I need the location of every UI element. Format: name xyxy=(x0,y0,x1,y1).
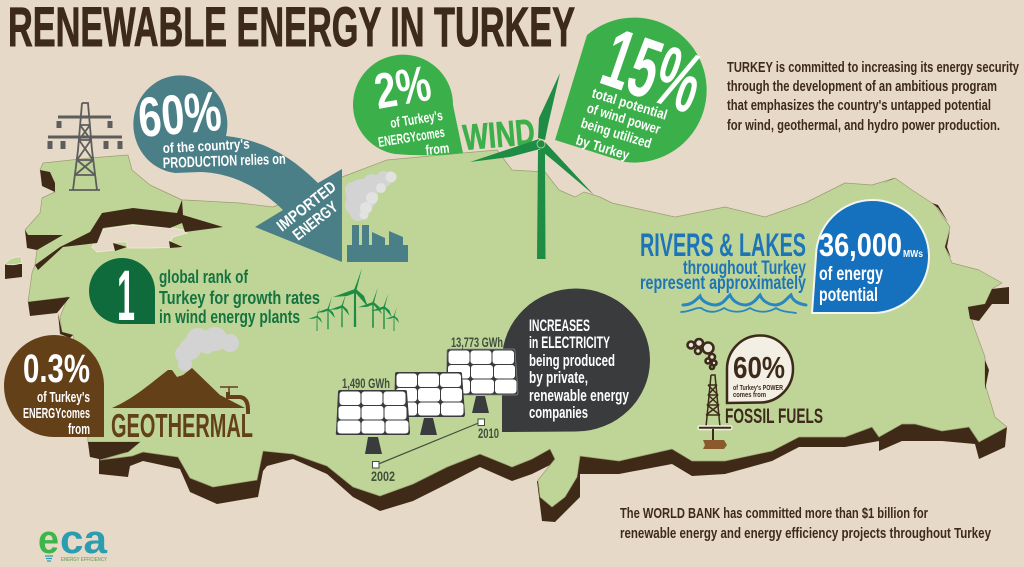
callout: 60% imported energy: PRODUCTION relies on xyxy=(163,151,286,172)
World Bank note xyxy=(620,505,991,542)
callout: 60% imported energy: IMPORTED xyxy=(274,179,340,235)
chart: GWh growth 2002 to 2010: 2010 xyxy=(478,425,499,441)
callout: 15% wind potential: by Turkey xyxy=(574,132,632,163)
icon: solar panel 2002 xyxy=(336,390,410,454)
callout: 60% imported energy: ENERGY xyxy=(290,199,342,244)
callout: 36,000 MWs: potential xyxy=(819,285,878,306)
green land mass xyxy=(25,150,1007,507)
coastal cliffs xyxy=(25,170,1009,457)
callout: 0.3%: of Turkey's xyxy=(37,389,90,406)
rivers and lakes text: RIVERS & LAKES xyxy=(640,227,806,263)
callout: 0.3%: ENERGYcomes xyxy=(23,405,90,422)
callout: 2% wind: 2% xyxy=(370,55,435,120)
panel: electricity increases: by private, xyxy=(529,368,588,387)
south coast shadow xyxy=(88,417,1007,522)
icon: solar panel 2010 xyxy=(446,349,518,413)
logo: ECA energy efficiency: ENERGY EFFICIENCY xyxy=(61,557,108,563)
callout: 2% wind: ENERGYcomes xyxy=(377,124,446,150)
callout: 36,000 MWs: of energy xyxy=(819,264,883,285)
icon: volcano with smoke and tap xyxy=(112,327,248,414)
World Bank note: The WORLD BANK has committed more than $1 billion for xyxy=(620,505,928,522)
chart: GWh growth 2002 to 2010: 2002 xyxy=(371,468,395,484)
icon: oil rig xyxy=(688,339,732,449)
global rank text: global rank of xyxy=(159,267,249,287)
panel: electricity increases: renewable energy xyxy=(529,386,629,405)
callout: 60% fossil fuels xyxy=(727,336,793,403)
chart: GWh growth 2002 to 2010: 1,490 GWh xyxy=(342,375,390,391)
callout: 15% wind potential: 15% xyxy=(591,10,714,131)
logo: ECA energy efficiency xyxy=(38,518,108,563)
panel: electricity increases: companies xyxy=(529,403,588,422)
callout: 60% fossil fuels: 60% xyxy=(733,350,785,385)
callout: 15% wind potential: total potential xyxy=(590,85,669,123)
icon: pylon xyxy=(48,103,122,190)
callout: 15% wind potential: of wind power xyxy=(585,100,663,137)
callout: 0.3% xyxy=(4,335,104,438)
panel: electricity increases xyxy=(502,288,650,432)
Sea of Marmara xyxy=(92,225,187,252)
callout: 0.3%: 0.3% xyxy=(23,347,90,391)
icon: solar panel middle xyxy=(394,372,465,435)
callout: 60% imported energy: 60% xyxy=(136,79,224,149)
logo: ECA energy efficiency: e xyxy=(38,518,59,562)
panel: electricity increases: being produced xyxy=(529,351,615,370)
global rank text xyxy=(159,267,320,327)
badge: number 1 global rank: 1 xyxy=(117,257,135,336)
geothermal label: GEOTHERMAL xyxy=(111,407,253,444)
intro text xyxy=(727,59,1019,134)
rivers and lakes text: represent approximately xyxy=(640,273,806,294)
badge: number 1 global rank xyxy=(89,257,155,336)
global rank text: Turkey for growth rates xyxy=(159,288,320,308)
rivers and lakes text xyxy=(640,227,806,294)
logo: ECA energy efficiency: ca xyxy=(60,518,108,562)
callout: 36,000 MWs xyxy=(812,200,929,313)
callout: 60% fossil fuels: comes from xyxy=(733,392,766,399)
icon: large wind turbine xyxy=(470,73,594,259)
callout: 36,000 MWs: MWs xyxy=(903,249,923,260)
rivers and lakes text: throughout Turkey xyxy=(683,258,806,279)
callout: 60% imported energy xyxy=(133,75,342,262)
callout: 2% wind: from xyxy=(425,140,450,158)
global rank text: in wind energy plants xyxy=(159,307,300,327)
panel: electricity increases: in ELECTRICITY xyxy=(529,333,610,352)
map of Turkey xyxy=(5,150,1009,522)
icon: waves xyxy=(681,295,806,313)
callout: 2% wind: of Turkey's xyxy=(389,107,444,131)
callout: 60% fossil fuels: of Turkey's POWER xyxy=(733,385,783,392)
callout: 0.3%: from xyxy=(68,421,90,438)
chart: GWh growth 2002 to 2010: 13,773 GWh xyxy=(451,334,503,350)
icon: small wind turbines xyxy=(308,268,399,331)
fossil fuels label: FOSSIL FUELS xyxy=(725,405,823,428)
chart: GWh growth 2002 to 2010 xyxy=(342,334,503,484)
callout: 2% wind xyxy=(353,55,463,158)
callout: 15% wind potential xyxy=(555,10,714,163)
callout: 60% imported energy: of the country's xyxy=(162,135,250,156)
panel: electricity increases: INCREASES xyxy=(529,316,590,335)
callout: 36,000 MWs: 36,000 xyxy=(819,227,902,263)
island xyxy=(5,257,22,279)
wind label: WIND xyxy=(461,111,536,158)
callout: 15% wind potential: being utilized xyxy=(579,115,654,151)
icon: factory with smoke xyxy=(345,171,408,262)
